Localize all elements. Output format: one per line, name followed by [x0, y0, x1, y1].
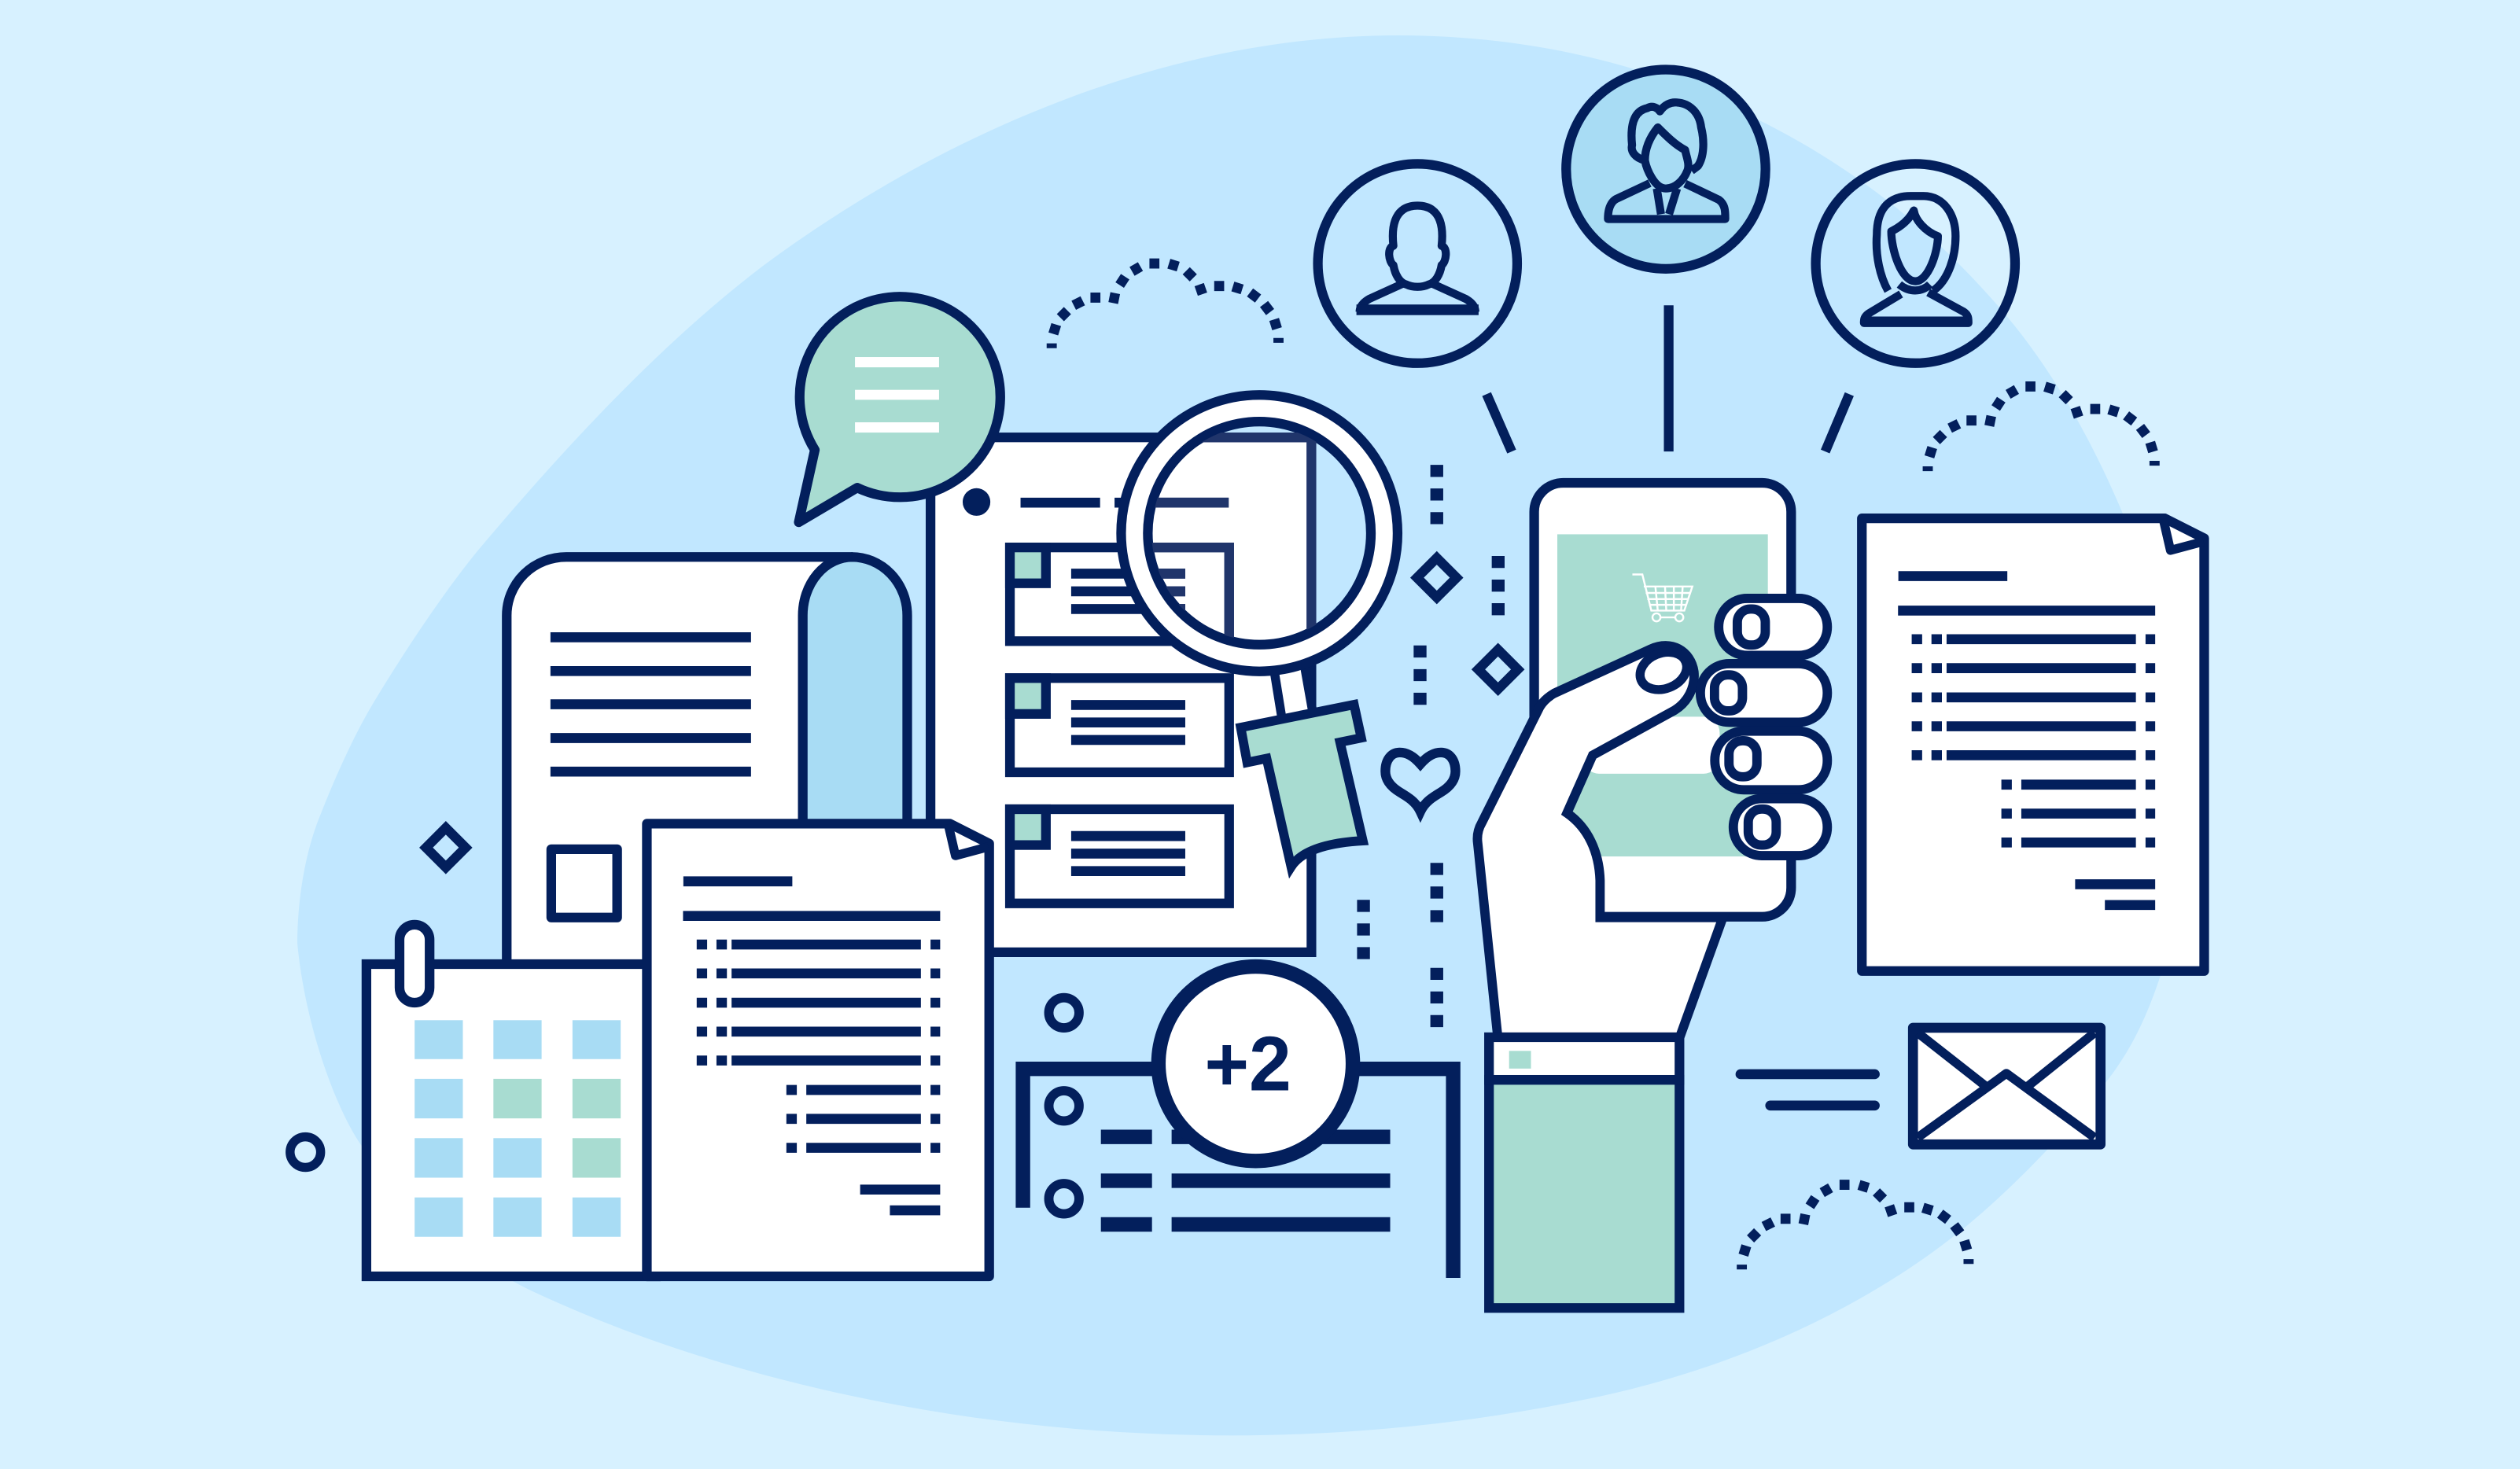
list card 3	[1010, 809, 1229, 904]
small circle left	[290, 1137, 321, 1167]
avatar: centre man	[1566, 69, 1766, 269]
list card 1	[1010, 547, 1229, 641]
calendar cells	[414, 1020, 621, 1237]
page header lines	[1021, 500, 1229, 505]
sleeve	[1489, 1080, 1679, 1308]
connector lines	[1487, 305, 1849, 451]
magnifier handle	[1240, 705, 1363, 867]
bracket frame	[1023, 1069, 1453, 1278]
plus two badge: +2	[1205, 1021, 1291, 1107]
magnified page lines	[1152, 433, 1317, 638]
bracket list lines	[1101, 1137, 1391, 1224]
list card 2	[1010, 678, 1229, 772]
finger three	[1715, 731, 1827, 790]
shopping cart icon	[1632, 574, 1693, 621]
heart icon	[1385, 753, 1455, 812]
avatar: woman	[1816, 164, 2015, 363]
magnifier lens ring	[1121, 395, 1398, 672]
finger one	[1719, 598, 1827, 655]
phone screen	[1557, 534, 1768, 856]
plus two badge	[1159, 966, 1353, 1161]
dotted markers	[1364, 465, 1498, 1029]
page header dot	[963, 488, 990, 516]
back list page	[930, 437, 1311, 952]
finger two	[1700, 664, 1827, 722]
speech bubble	[799, 296, 1000, 522]
illustration canvas	[286, 35, 2209, 1436]
document right	[1862, 518, 2204, 971]
dashed cloud: bottom right	[1742, 1185, 1969, 1269]
calendar	[367, 925, 656, 1276]
magnifying glass	[1116, 390, 1403, 879]
smartphone	[1534, 483, 1791, 917]
avatar: man	[1318, 164, 1517, 363]
hand	[1477, 646, 1722, 1038]
document left	[647, 823, 989, 1276]
dashed cloud: top centre	[1052, 263, 1278, 348]
paper scroll	[507, 557, 907, 980]
diamond left	[426, 828, 466, 867]
finger four	[1733, 799, 1827, 856]
magnifier neck	[1273, 660, 1313, 715]
diamond centre upper	[1417, 558, 1457, 598]
left bullets	[1049, 998, 1079, 1214]
thumb nail	[1634, 646, 1693, 696]
calendar clip	[400, 925, 429, 1003]
white band on screen	[1583, 716, 1719, 774]
envelope	[1913, 1028, 2101, 1144]
diamond centre lower	[1478, 650, 1518, 689]
mail motion lines	[1741, 1074, 1875, 1106]
cuff	[1489, 1037, 1679, 1080]
background blob	[297, 35, 2174, 1435]
dashed cloud: top right	[1928, 386, 2154, 471]
fingers	[1700, 598, 1827, 856]
